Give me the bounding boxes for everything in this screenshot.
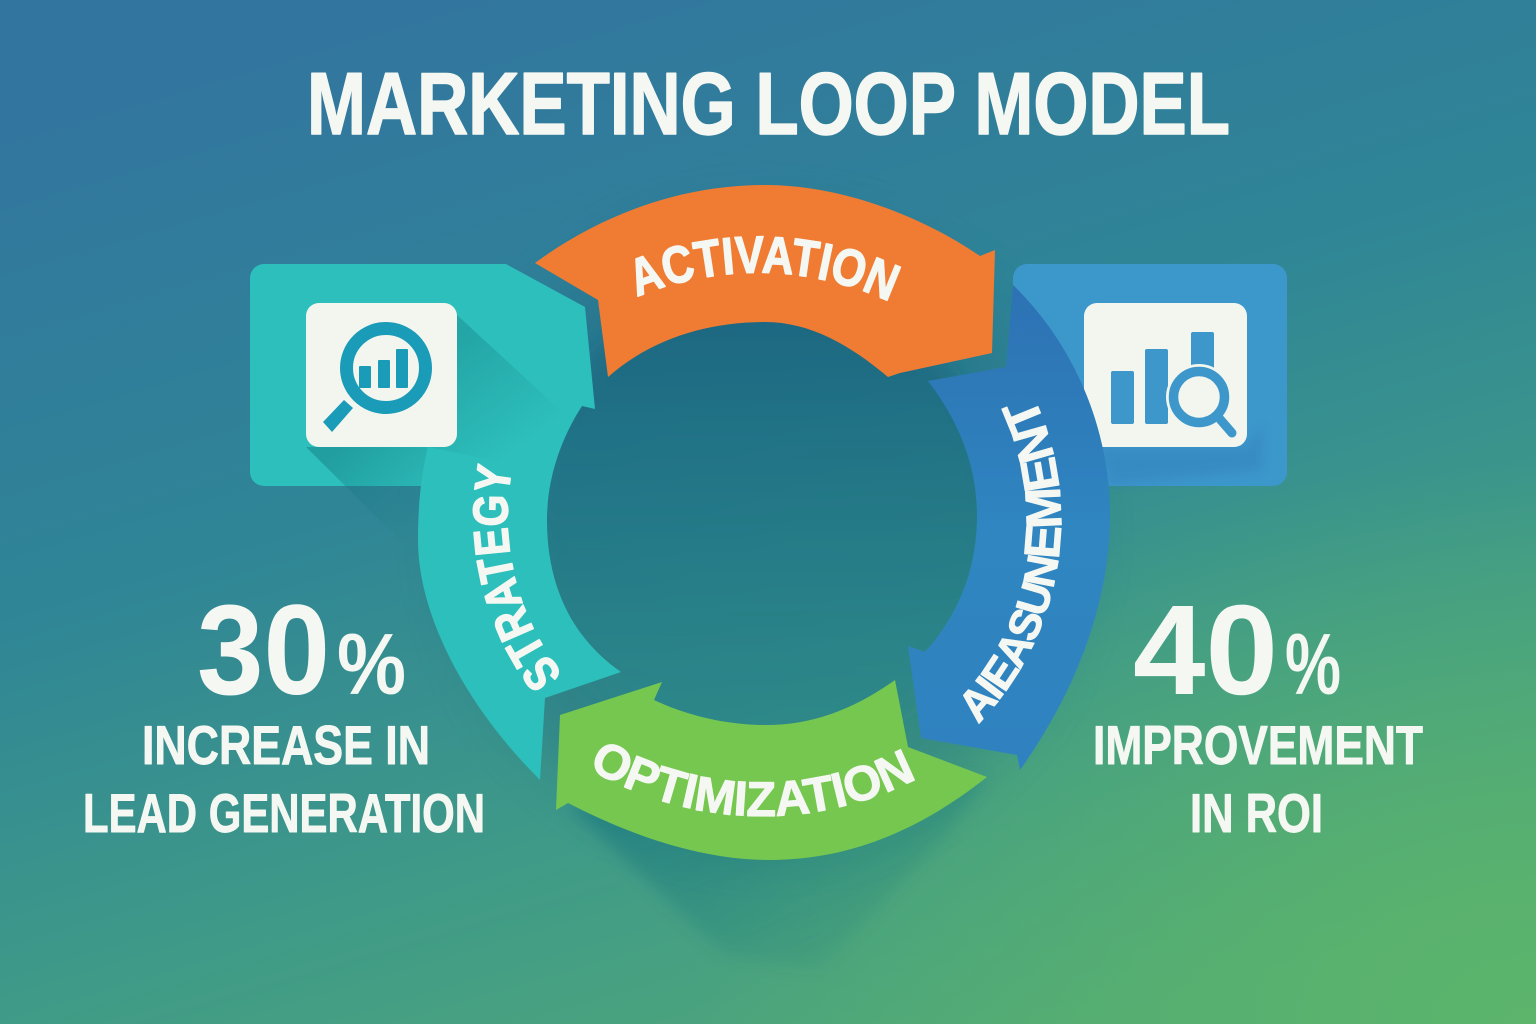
stat: 40 percent ROI <box>1093 579 1423 844</box>
stat: 30 percent lead generation: LEAD GENERATION <box>83 782 485 844</box>
shadow of measurement icon tile <box>1095 425 1262 486</box>
icon tile: strategy magnifier chart <box>306 303 457 447</box>
long shadow of strategy icon tile on arrow <box>428 315 560 470</box>
stat: 30 percent lead generation: % <box>337 617 406 713</box>
arrow: strategy <box>400 264 621 780</box>
stat: 30 percent lead generation <box>83 579 485 844</box>
label: measurement: AIEASUNEMENT <box>962 406 1062 724</box>
magnifier <box>1166 364 1232 433</box>
icon tile: measurement chart with magnifier <box>1084 303 1247 447</box>
stat: 30 percent lead generation: INCREASE IN <box>142 714 430 776</box>
arrow: optimization <box>556 680 987 860</box>
title: MARKETING LOOP MODEL <box>307 54 1230 153</box>
label: strategy: STRATEGY <box>472 463 559 690</box>
stat: 40 percent ROI: IN ROI <box>1190 782 1323 844</box>
label: activation: ACTIVATION <box>635 236 902 302</box>
label: optimization: OPTIMIZATION <box>594 744 915 817</box>
stat: 40 percent ROI: % <box>1285 617 1341 713</box>
arrow: activation <box>535 185 995 377</box>
soft ring shadow <box>455 220 1075 840</box>
rising bars <box>359 349 408 388</box>
bars <box>1111 332 1214 424</box>
arrow: measurement <box>908 285 1110 770</box>
panel: teal icon card <box>250 264 490 486</box>
magnifier lens <box>346 328 426 408</box>
long shadow under optimization arrow <box>568 777 987 970</box>
long shadow of strategy icon tile below card <box>306 447 440 560</box>
magnifier handle <box>323 400 353 432</box>
panel: blue icon card <box>1013 264 1287 486</box>
stat: 40 percent ROI: IMPROVEMENT <box>1093 714 1423 776</box>
stat: 30 percent lead generation: 30 <box>197 579 330 722</box>
stat: 40 percent ROI: 40 <box>1133 579 1278 722</box>
